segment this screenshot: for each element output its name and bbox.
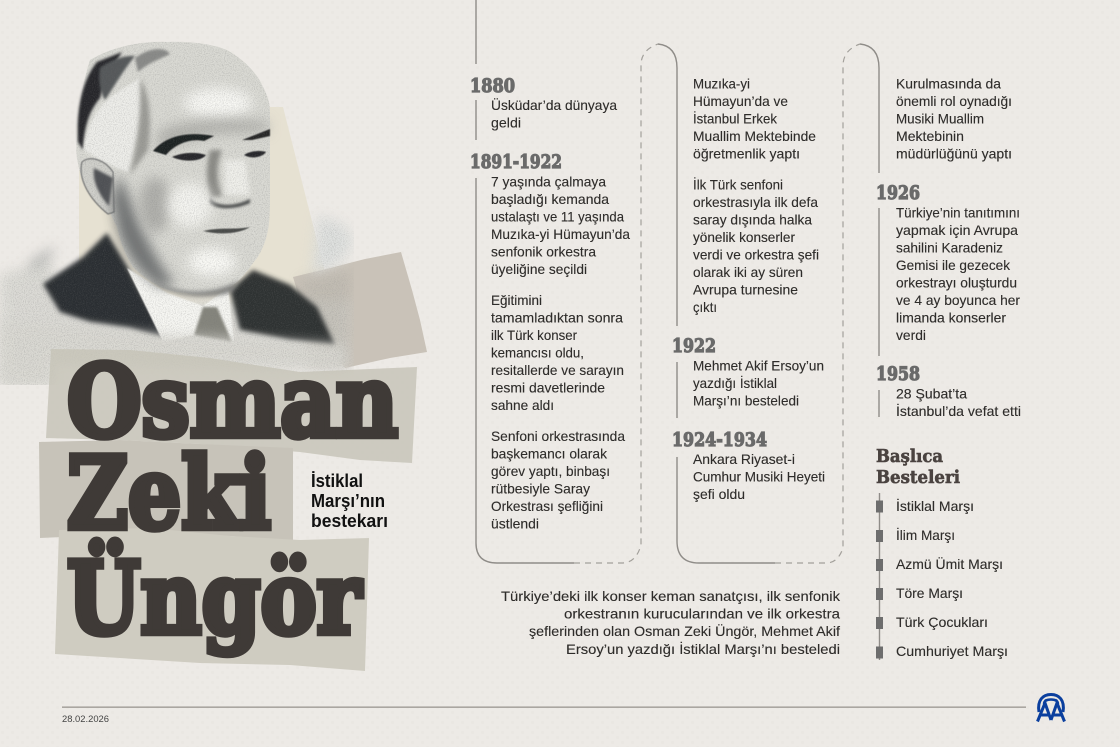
forehead highlight [184, 88, 252, 118]
beige paper behind portrait [79, 107, 335, 310]
torn paper blending [300, 270, 350, 365]
title: Osman Zeki Üngör [67, 344, 398, 657]
text 1926 [896, 206, 1020, 343]
right eye [244, 151, 266, 157]
text continued: Avrupa turnesine [693, 282, 798, 298]
list of compositions: İlim Marşı [896, 528, 955, 543]
text 1891-1922 [491, 174, 630, 532]
subtitle [311, 470, 388, 531]
text 1891-1922: resitallerde ve sarayın [491, 363, 624, 378]
subtitle: Marşı’nın [311, 490, 385, 511]
chin shadow [150, 278, 240, 296]
text continued: müdürlüğünü yaptı [896, 146, 1012, 162]
text continued: Kurulmasında da [896, 76, 1001, 92]
temple shadow [130, 78, 150, 175]
timeline connector lines [476, 0, 879, 563]
text 1891-1922: Muzıka-yi Hümayun’da [491, 227, 630, 242]
text 1922: Mehmet Akif Ersoy’un [693, 358, 824, 374]
text 1891-1922: kemancısı oldu, [491, 346, 584, 360]
text 1891-1922: ilk Türk konser [491, 328, 577, 343]
list of compositions: Töre Marşı [896, 586, 963, 601]
text 1958: İstanbul’da vefat etti [896, 404, 1021, 419]
text continued: çıktı [693, 300, 717, 315]
text 1891-1922: görev yaptı, binbaşı [491, 464, 610, 479]
mid cheek shading [139, 177, 171, 233]
ear [81, 159, 114, 214]
text 1922: yazdığı İstiklal [693, 376, 777, 391]
jacket left [43, 233, 165, 338]
right eyebrow [242, 129, 270, 140]
jowl shading [112, 175, 175, 287]
summary paragraph: orkestranın kurucularından ve ilk orkestra [564, 606, 840, 622]
forehead lower shade [155, 120, 268, 150]
crown shadow [135, 49, 170, 72]
subtitle: bestekarı [311, 510, 388, 531]
list of compositions: Türk Çocukları [896, 615, 988, 630]
text 1958: 28 Şubat’ta [896, 386, 967, 402]
portrait photograph [0, 42, 354, 385]
mouth [203, 227, 250, 233]
head [76, 42, 270, 294]
heading: Başlıca Besteleri: Besteleri [876, 467, 960, 488]
text 1926: orkestrayı oluşturdu [896, 276, 1017, 290]
text 1924-1934: şefi oldu [693, 487, 745, 502]
timeline column 1 [470, 75, 630, 532]
strip: Osman [46, 349, 417, 463]
title: Osman Zeki Üngör: Zeki [67, 436, 271, 552]
text 1891-1922: ustalaştı ve 11 yaşında [491, 210, 624, 224]
cheek highlight [168, 183, 212, 227]
text continued: olarak iki ay süren [693, 265, 803, 280]
year 1922: 1922 [672, 335, 716, 357]
text continued: Mektebinin [896, 129, 964, 144]
text continued: yönelik konserler [693, 230, 795, 245]
text 1891-1922: 7 yaşında çalmaya [491, 174, 606, 190]
shirt collar [127, 268, 234, 342]
text 1880 [491, 98, 617, 130]
heading: Başlıca Besteleri [876, 446, 960, 488]
text 1926: sahilini Karadeniz [896, 240, 1003, 256]
jacket right [230, 270, 335, 345]
text 1924-1934: Ankara Riyaset-i [693, 452, 795, 467]
text continued: saray dışında halka [693, 212, 812, 228]
text 1891-1922: tamamladıktan sonra [491, 310, 623, 326]
summary paragraph: Ersoy’un yazdığı İstiklal Marşı’nı besteledi [566, 642, 840, 657]
text continued: öğretmenlik yaptı [693, 146, 800, 162]
text continued [693, 76, 819, 315]
year 1891-1922: 1891-1922 [470, 151, 562, 173]
left eye [172, 153, 206, 161]
text 1891-1922: üstlendi [491, 516, 539, 532]
list of compositions: İstiklal Marşı [896, 499, 974, 514]
text 1926: verdi [896, 328, 926, 343]
text 1922 [693, 358, 824, 408]
summary paragraph: şeflerinden olan Osman Zeki Üngör, Mehmet Akif [529, 624, 840, 639]
text continued: Muzıka-yi [693, 76, 750, 92]
subtitle: İstiklal [311, 470, 363, 491]
date: 28.02.2026 [62, 714, 109, 725]
text 1880: Üsküdar’da dünyaya [491, 98, 617, 113]
year 1880: 1880 [470, 75, 515, 97]
text 1926: Gemisi ile gezecek [896, 258, 1010, 273]
year 1958: 1958 [876, 363, 920, 385]
text continued: Hümayun’da ve [693, 94, 788, 109]
text 1891-1922: sahne aldı [491, 398, 554, 413]
left eyebrow [153, 134, 214, 155]
chin highlight [188, 248, 236, 276]
text 1891-1922: Orkestrası şefliğini [491, 499, 603, 514]
year 1926: 1926 [876, 182, 920, 204]
strip: Üngör [55, 528, 369, 671]
name strips [39, 349, 417, 671]
text 1926: ve 4 ay boyunca her [896, 293, 1020, 308]
text continued: orkestrasıyla ilk defa [693, 195, 818, 210]
text 1891-1922: Senfoni orkestrasında [491, 429, 625, 444]
footer rule [62, 706, 1026, 708]
list of compositions: Cumhuriyet Marşı [896, 644, 1008, 659]
icon: AA logo [1038, 694, 1064, 722]
hair dark [78, 52, 122, 150]
nose base [209, 197, 250, 208]
text continued: verdi ve orkestra şefi [693, 248, 819, 262]
text 1924-1934: Cumhur Musiki Heyeti [693, 470, 825, 484]
text 1891-1922: Eğitimini [491, 293, 542, 308]
nose side shadow [207, 150, 222, 198]
text 1891-1922: üyeliğine seçildi [491, 262, 587, 277]
year 1924-1934: 1924-1934 [672, 429, 767, 451]
text 1926: Türkiye’nin tanıtımını [896, 206, 1020, 220]
title: Osman Zeki Üngör: Üngör [67, 539, 363, 657]
text 1922: Marşı’nı besteledi [693, 394, 799, 408]
summary paragraph [501, 589, 840, 657]
text 1891-1922: senfonik orkestra [491, 244, 596, 260]
hair dark streak [99, 56, 135, 100]
text 1880: geldi [491, 116, 521, 130]
heading: Başlıca Besteleri: Başlıca [876, 446, 943, 467]
text 1891-1922: başladığı kemanda [491, 192, 609, 207]
hair white [84, 78, 141, 172]
text 1924-1934 [693, 452, 825, 502]
text continued: İlk Türk senfoni [693, 178, 783, 192]
nose highlight [225, 160, 250, 195]
torn paper top right [293, 252, 427, 368]
summary paragraph: Türkiye’deki ilk konser keman sanatçısı, ilk senfonik [501, 589, 840, 604]
title: Osman Zeki Üngör: Osman [67, 344, 398, 460]
list of compositions: Azmü Ümit Marşı [896, 557, 1003, 572]
text continued: İstanbul Erkek [693, 112, 777, 126]
text 1891-1922: rütbesiyle Saray [491, 482, 590, 496]
mist around shoulders [0, 215, 354, 385]
text continued: Muallim Mektebinde [693, 129, 816, 144]
text 1926: limanda konserler [896, 310, 1006, 326]
strip: Zeki [39, 440, 293, 541]
text continued [896, 76, 1012, 162]
timeline column 2 [672, 76, 825, 502]
lower mist fade [0, 320, 345, 385]
tie [194, 307, 232, 342]
text 1891-1922: başkemancı olarak [491, 446, 607, 462]
timeline column 3 [876, 76, 1021, 419]
ear inner [94, 168, 113, 206]
text 1926: yapmak için Avrupa [896, 223, 1018, 238]
text 1891-1922: resmi davetlerinde [491, 380, 605, 396]
text 1958 [896, 386, 1021, 419]
text continued: Musiki Muallim [896, 112, 984, 126]
list of compositions [876, 493, 1008, 660]
text continued: önemli rol oynadığı [896, 94, 1012, 109]
